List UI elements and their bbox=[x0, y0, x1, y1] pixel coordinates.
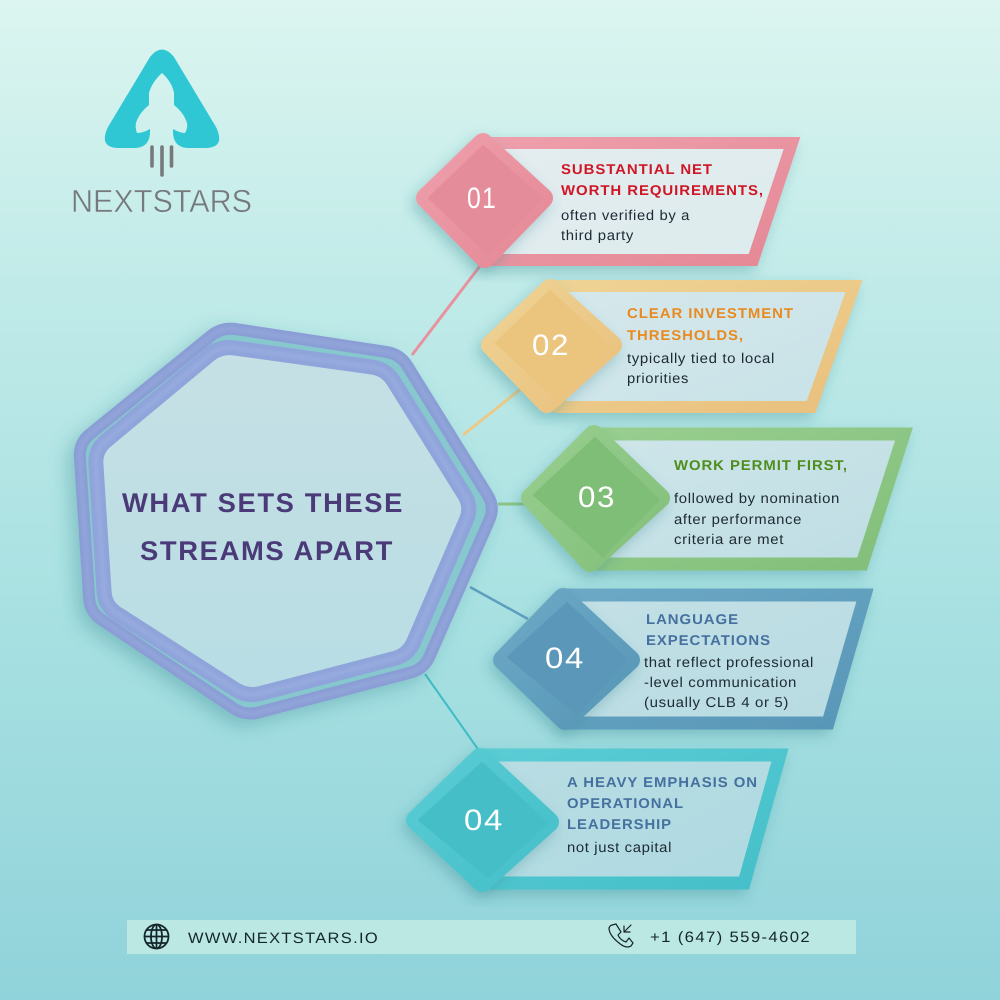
website: WWW.NEXTSTARS.IO bbox=[188, 930, 379, 947]
footer background bbox=[127, 920, 856, 954]
icon: globe bbox=[144, 924, 168, 948]
item text: LANGUAGE bbox=[646, 612, 739, 628]
icon: rocket triangle bbox=[105, 50, 219, 148]
item text: (usually CLB 4 or 5) bbox=[644, 695, 789, 711]
item text: THRESHOLDS, bbox=[627, 328, 744, 344]
item text: typically tied to local bbox=[627, 351, 775, 367]
item text: EXPECTATIONS bbox=[646, 633, 771, 649]
item text bbox=[674, 458, 848, 548]
card frame bbox=[490, 755, 780, 883]
diamond face bbox=[508, 603, 627, 714]
number: 01 bbox=[467, 182, 497, 215]
diamond face bbox=[419, 763, 547, 877]
heading: STREAMS APART bbox=[140, 536, 394, 566]
item text: not just capital bbox=[567, 840, 672, 856]
diamond badge bbox=[503, 598, 630, 720]
item text: WORTH REQUIREMENTS, bbox=[561, 183, 764, 199]
icon: rocket exhaust lines bbox=[152, 147, 172, 175]
panel: item 04 leadership bbox=[416, 755, 780, 883]
number: 02 bbox=[532, 329, 570, 362]
card frame bbox=[560, 286, 854, 407]
item text: A HEAVY EMPHASIS ON bbox=[567, 775, 758, 791]
item text: criteria are met bbox=[674, 532, 784, 548]
logo bbox=[71, 50, 252, 219]
item text: often verified by a bbox=[561, 208, 690, 224]
card frame bbox=[570, 595, 865, 723]
item text bbox=[627, 306, 794, 387]
connector lines bbox=[412, 266, 528, 752]
item text: OPERATIONAL bbox=[567, 796, 684, 812]
diamond face bbox=[429, 146, 542, 254]
outer ring bbox=[80, 329, 492, 714]
item text: SUBSTANTIAL NET bbox=[561, 162, 713, 178]
item text: third party bbox=[561, 228, 634, 244]
item text: after performance bbox=[674, 512, 802, 528]
item text: priorities bbox=[627, 371, 689, 387]
panel: item 02 bbox=[491, 286, 854, 407]
diamond badge bbox=[416, 758, 549, 882]
heading: WHAT SETS THESE bbox=[122, 488, 404, 518]
item text bbox=[561, 162, 764, 244]
panel: central heptagon bbox=[80, 329, 492, 714]
number: 04 bbox=[464, 804, 504, 837]
item text: CLEAR INVESTMENT bbox=[627, 306, 794, 322]
item text: WORK PERMIT FIRST, bbox=[674, 458, 848, 474]
item text bbox=[567, 775, 758, 856]
number: 03 bbox=[578, 481, 616, 514]
item text: that reflect professional bbox=[644, 655, 814, 671]
item text: followed by nomination bbox=[674, 491, 840, 507]
diamond face bbox=[534, 438, 659, 556]
heading bbox=[122, 488, 404, 566]
diamond face bbox=[496, 291, 611, 399]
item text bbox=[644, 612, 814, 711]
diamond badge bbox=[531, 435, 660, 562]
inner ring bbox=[96, 348, 469, 695]
footer bar bbox=[127, 920, 856, 954]
logo wordmark: NEXTSTARS bbox=[71, 183, 252, 219]
panel: item 04 language bbox=[503, 595, 865, 723]
diamond badge bbox=[491, 289, 612, 403]
number: 04 bbox=[545, 642, 585, 675]
icon: phone bbox=[609, 924, 633, 947]
item text: LEADERSHIP bbox=[567, 817, 672, 833]
phone number: +1 (647) 559-4602 bbox=[650, 929, 811, 946]
diamond badge bbox=[426, 143, 543, 258]
item text: -level communication bbox=[644, 675, 797, 691]
panel: item 01 bbox=[426, 143, 792, 260]
panel: item 03 bbox=[531, 434, 904, 564]
card frame bbox=[600, 434, 904, 564]
card frame bbox=[490, 143, 792, 260]
